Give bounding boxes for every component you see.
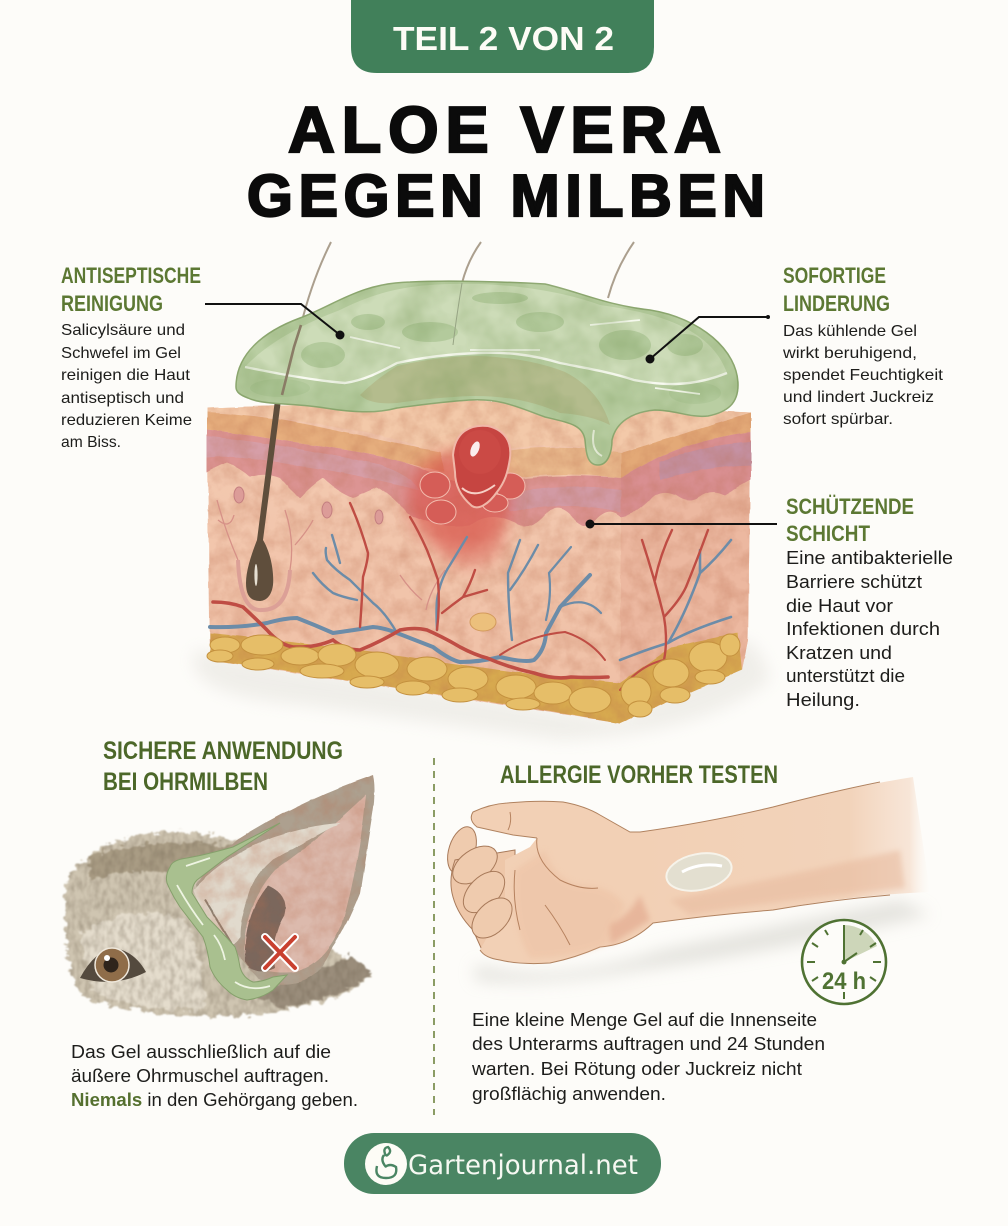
- illustration: forearm with gel patch: [442, 777, 930, 982]
- callout: antiseptische Reinigung: [61, 263, 201, 451]
- callout: antiseptische Reinigung: reinigen die Haut: [61, 367, 191, 384]
- gel patch: [663, 848, 735, 896]
- text: Ohrmilben Anwendung: Das Gel ausschließlich auf die: [71, 1042, 331, 1062]
- callout: schützende Schicht: [786, 494, 953, 710]
- callout: schützende Schicht: SCHICHT: [786, 521, 870, 546]
- heading: sichere Anwendung bei Ohrmilben: [103, 737, 343, 796]
- eye: [80, 948, 146, 982]
- icon: 24 h timer: 24 h: [822, 968, 866, 995]
- callout: schützende Schicht: Heilung.: [786, 690, 860, 710]
- ground shadow: [193, 640, 770, 740]
- text: Allergietest: des Unterarms auftragen und 24 Stunden: [472, 1034, 825, 1054]
- skin block: [207, 400, 751, 723]
- illustration: skin cross-section with gel: [193, 242, 770, 740]
- callout: schützende Schicht: Kratzen und: [786, 643, 892, 663]
- arteries red: [213, 503, 708, 690]
- text: Ohrmilben Anwendung: Niemals in den Gehörgang geben.: [71, 1090, 358, 1110]
- illustration: dog ear with gel: [64, 775, 374, 1016]
- callout: antiseptische Reinigung: Schwefel im Gel: [61, 345, 181, 362]
- ear: [193, 775, 374, 984]
- callout: sofortige Linderung: sofort spürbar.: [783, 411, 893, 428]
- callout: antiseptische Reinigung: am Biss.: [61, 434, 121, 451]
- icon: logo: [365, 1143, 407, 1185]
- text: Ohrmilben Anwendung: [71, 1042, 358, 1110]
- callout: sofortige Linderung: und lindert Juckreiz: [783, 389, 934, 406]
- heading: sichere Anwendung bei Ohrmilben: SICHERE ANWENDUNG: [103, 737, 343, 765]
- tan band: [207, 412, 445, 472]
- text: Ohrmilben Anwendung: äußere Ohrmuschel auftragen.: [71, 1066, 329, 1086]
- palm shading: [514, 850, 625, 958]
- hair follicle: [238, 392, 290, 610]
- callout: schützende Schicht: Eine antibakterielle: [786, 548, 953, 568]
- callout: sofortige Linderung: SOFORTIGE: [783, 263, 886, 288]
- heading: sichere Anwendung bei Ohrmilben: BEI OHRMILBEN: [103, 768, 268, 796]
- callout: sofortige Linderung: wirkt beruhigend,: [782, 345, 917, 362]
- footer badge: Gartenjournal.net: Gartenjournal.net: [408, 1150, 638, 1181]
- callout: schützende Schicht: unterstützt die: [786, 666, 905, 686]
- arm outline: [471, 782, 890, 964]
- callout: antiseptische Reinigung: reduzieren Keime: [61, 412, 192, 429]
- right side face: [620, 413, 751, 723]
- callout: sofortige Linderung: spendet Feuchtigkeit: [783, 367, 944, 384]
- finger: index: [442, 823, 482, 877]
- hair strands above gel: [301, 242, 634, 325]
- callout: schützende Schicht: SCHÜTZENDE: [786, 494, 914, 519]
- callout: schützende Schicht: Barriere schützt: [786, 572, 922, 592]
- text: Allergietest: großflächig anwenden.: [472, 1084, 666, 1104]
- callout: schützende Schicht: Infektionen durch: [786, 619, 940, 639]
- text: Allergietest: warten. Bei Rötung oder Juckreiz nicht: [471, 1059, 802, 1079]
- vesicles around bite: [420, 472, 525, 524]
- top surface: [207, 400, 751, 470]
- callout: schützende Schicht: die Haut vor: [786, 596, 893, 616]
- callout: sofortige Linderung: LINDERUNG: [783, 291, 890, 316]
- callout: antiseptische Reinigung: antiseptisch und: [61, 390, 184, 407]
- text: Allergietest: Eine kleine Menge Gel auf die Innenseite: [472, 1010, 817, 1030]
- finger base: [451, 850, 515, 950]
- callout: sofortige Linderung: [782, 263, 944, 428]
- leader line: schützende Schicht: [586, 520, 777, 528]
- veins blue: [210, 535, 731, 662]
- warning X: [265, 937, 295, 968]
- leader line: antiseptische Reinigung: [205, 304, 344, 340]
- title: ALOE VERA: [288, 93, 721, 166]
- leader line: sofortige Linderung: [646, 315, 770, 364]
- hand and forearm: [471, 777, 930, 964]
- heading: Allergie vorher testen: ALLERGIE VORHER TESTEN: [500, 761, 778, 789]
- hair inside gel: [282, 325, 301, 395]
- callout: antiseptische Reinigung: Salicylsäure und: [61, 322, 185, 339]
- text: Allergietest: [471, 1010, 825, 1104]
- epidermis layer: [207, 430, 621, 526]
- fat blobs: [207, 634, 740, 717]
- dermis base: [207, 400, 751, 723]
- icon: 24 h timer: [802, 920, 886, 1004]
- fur: [64, 832, 372, 1016]
- pale capillaries: [217, 500, 445, 610]
- fingers: [446, 838, 520, 946]
- divider: [433, 758, 435, 1115]
- title: [247, 93, 765, 229]
- sweat glands: [234, 487, 383, 524]
- epidermis right side: [621, 432, 751, 517]
- fat layer: [210, 633, 742, 723]
- badge: Teil 2 von 2: [351, 0, 654, 73]
- title: GEGEN MILBEN: [247, 163, 765, 229]
- callout: antiseptische Reinigung: ANTISEPTISCHE: [61, 263, 201, 288]
- footer badge: Gartenjournal.net: [344, 1133, 661, 1194]
- shadow: [475, 900, 930, 982]
- callout: antiseptische Reinigung: REINIGUNG: [61, 291, 163, 316]
- callout: sofortige Linderung: Das kühlende Gel: [783, 323, 917, 340]
- aloe gel blob: [236, 281, 738, 465]
- bite bump: [453, 426, 510, 507]
- badge: Teil 2 von 2: TEIL 2 VON 2: [393, 20, 614, 57]
- gel strip: [166, 823, 287, 1000]
- bite redness: [408, 450, 512, 550]
